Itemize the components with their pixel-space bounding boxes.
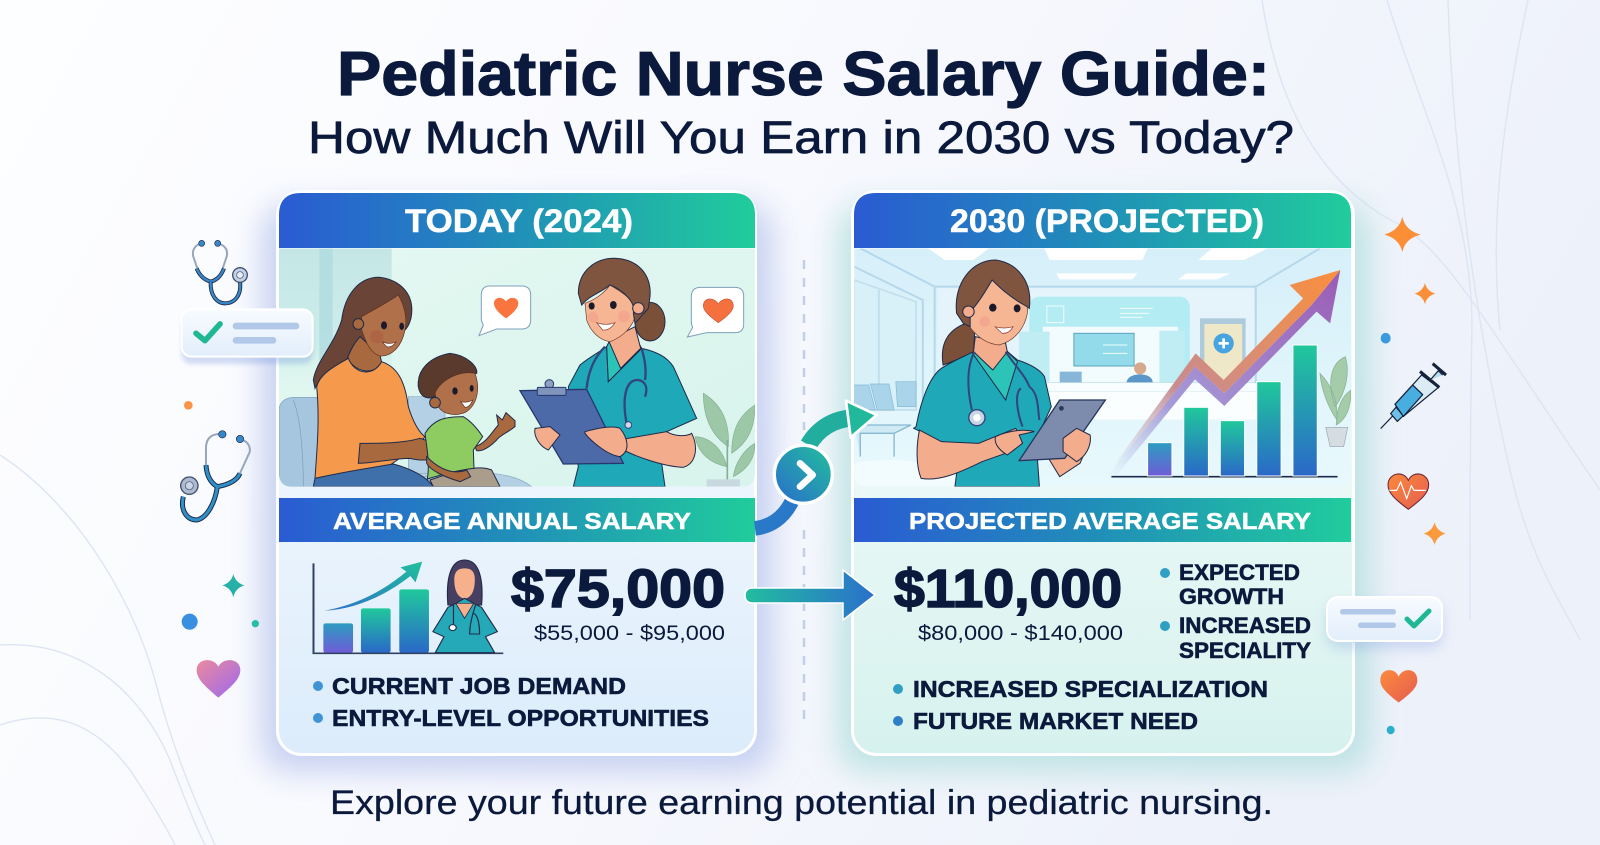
teal dot [1387, 726, 1395, 734]
side bullet: expected growth: EXPECTED [1179, 560, 1300, 585]
illustration: mother, child and nurse [279, 248, 755, 487]
bullet [313, 681, 323, 691]
small orange sparkle [1424, 522, 1446, 545]
nurse with tablet [914, 260, 1090, 487]
today header band [279, 193, 755, 248]
bullet text: CURRENT JOB DEMAND [332, 673, 626, 699]
teal dot [252, 620, 259, 627]
heart [197, 660, 240, 698]
bullet [893, 716, 903, 726]
projected salary figure: $110,000 [894, 559, 1122, 619]
mini nurse [433, 560, 497, 653]
icon: syringe [1381, 364, 1446, 429]
today salary range: $55,000 - $95,000 [534, 621, 725, 645]
speech bubble with heart [479, 286, 531, 336]
side bullet: increased speciality: SPECIALITY [1179, 638, 1311, 663]
child [418, 353, 515, 487]
speech bubble with heart [687, 287, 744, 337]
salary band [279, 498, 755, 542]
nurse with clipboard [568, 258, 697, 487]
bullet [313, 713, 323, 723]
panel: today (2024) [278, 192, 756, 754]
bullet text: FUTURE MARKET NEED [913, 708, 1198, 734]
bullet text: ENTRY-LEVEL OPPORTUNITIES [332, 705, 709, 731]
small orange sparkle [1415, 283, 1435, 304]
mother [313, 277, 443, 487]
projected salary band [854, 498, 1351, 542]
clipboard [520, 380, 623, 464]
large orange sparkle [1384, 217, 1421, 252]
bullet text: INCREASED SPECIALIZATION [913, 676, 1268, 702]
card shadows [262, 205, 1370, 771]
side bullet: increased speciality [1160, 613, 1311, 663]
icon: heart with pulse [1388, 474, 1429, 509]
bullet [893, 684, 903, 694]
growth arrow [1110, 270, 1340, 477]
divider: dashed line [803, 260, 805, 725]
left decorations [181, 240, 313, 698]
illustration: nurse with tablet and growth chart [854, 248, 1351, 487]
check card [182, 309, 313, 364]
icon: stethoscope [181, 431, 250, 520]
blue dot [182, 614, 198, 630]
curved arrow with chevron badge [755, 401, 877, 528]
check card [1327, 597, 1442, 648]
icon: stethoscope [193, 240, 247, 303]
plant [1320, 357, 1351, 447]
orange heart [1380, 670, 1417, 702]
footer tagline: Explore your future earning potential in pediatric nursing. [330, 784, 1273, 822]
today heading: TODAY (2024) [405, 203, 633, 239]
mini bar chart with nurse [313, 560, 503, 653]
side bullet: increased speciality: INCREASED [1179, 613, 1311, 638]
salary band label: AVERAGE ANNUAL SALARY [333, 508, 691, 534]
side bullet: expected growth: GROWTH [1179, 584, 1284, 609]
projected band label: PROJECTED AVERAGE SALARY [909, 508, 1311, 534]
panel: 2030 (projected) [852, 192, 1354, 754]
teal sparkle [222, 574, 244, 597]
blue dot [1381, 333, 1391, 344]
tablet [1019, 400, 1105, 461]
today salary figure: $75,000 [511, 559, 725, 619]
straight arrow [745, 570, 875, 620]
subtitle: How Much Will You Earn in 2030 vs Today? [308, 112, 1294, 163]
orange dot [184, 401, 193, 410]
projected heading: 2030 (PROJECTED) [950, 203, 1264, 239]
projected salary range: $80,000 - $140,000 [918, 621, 1123, 645]
bars [1111, 345, 1338, 477]
right decorations [1380, 217, 1446, 734]
projected header band [854, 193, 1351, 248]
title: Pediatric Nurse Salary Guide: [337, 40, 1270, 109]
side bullet: expected growth [1160, 560, 1300, 609]
